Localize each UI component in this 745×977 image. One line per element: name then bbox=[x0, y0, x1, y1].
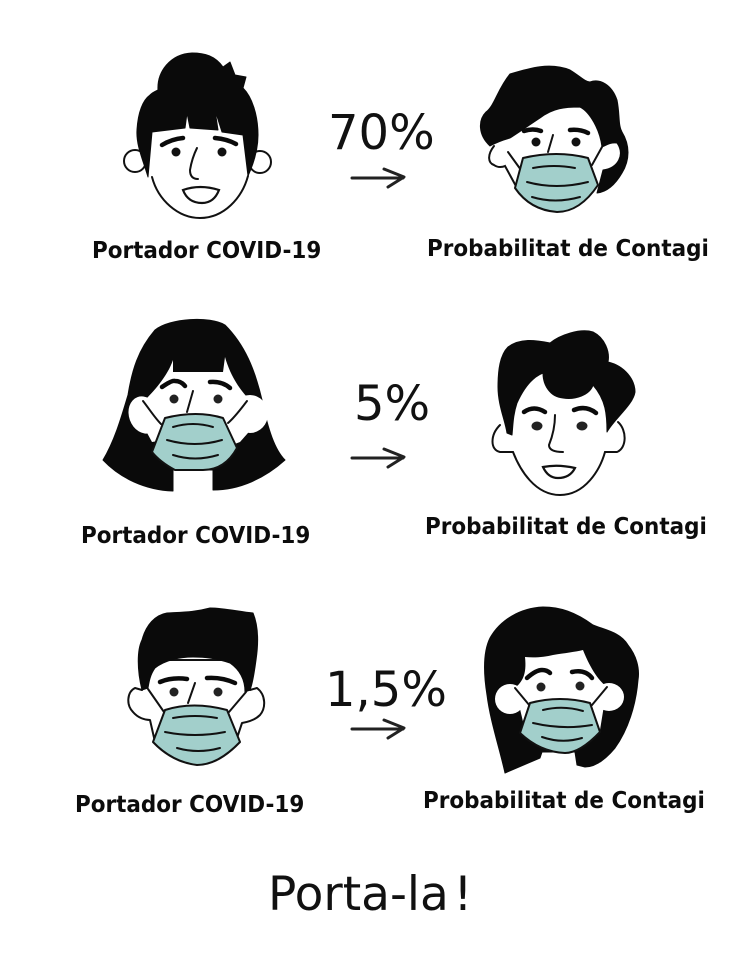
row 2 carrier: long hair with mask bbox=[103, 319, 285, 491]
row 1 recipient: masked face bbox=[480, 66, 628, 212]
row 3 carrier: masked man bbox=[128, 608, 264, 765]
row 2 percentage: 5% bbox=[354, 376, 430, 432]
row 1 arrow bbox=[352, 169, 404, 187]
row 3 recipient: masked woman bbox=[485, 607, 639, 773]
row 2 recipient: unmasked face bbox=[492, 331, 635, 495]
row 1 carrier: unmasked face with bun bbox=[124, 53, 271, 218]
row 2 carrier label: Portador COVID-19 bbox=[81, 522, 310, 549]
row 1 recipient label: Probabilitat de Contagi bbox=[427, 235, 709, 262]
row 1 carrier label: Portador COVID-19 bbox=[92, 237, 321, 264]
row 1 percentage: 70% bbox=[328, 105, 435, 161]
row 3 carrier label: Portador COVID-19 bbox=[75, 791, 304, 818]
row 2 recipient label: Probabilitat de Contagi bbox=[425, 513, 707, 540]
row 3 percentage: 1,5% bbox=[325, 662, 447, 718]
closing slogan: ! bbox=[454, 867, 472, 922]
row 2 arrow bbox=[352, 449, 404, 467]
closing slogan: Porta-la bbox=[268, 867, 449, 922]
row 3 recipient label: Probabilitat de Contagi bbox=[423, 787, 705, 814]
row 3 arrow bbox=[352, 720, 404, 738]
